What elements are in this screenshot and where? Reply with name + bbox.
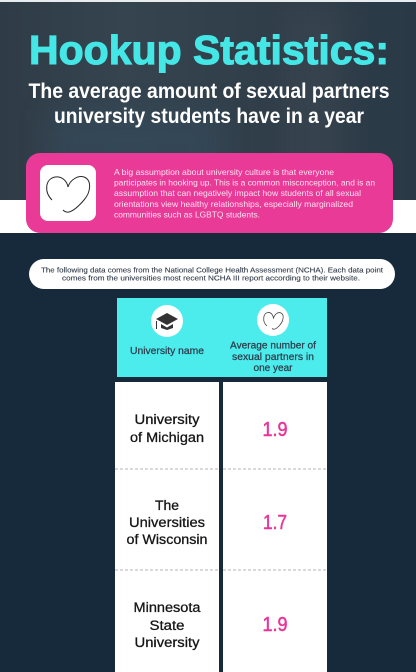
intro text: A big assumption about university culture is that everyone: [114, 168, 335, 177]
row 3 name: University: [134, 635, 200, 650]
source note: comes from the universities most recent NCHA III report according to their website.: [62, 274, 360, 282]
subtitle: university students have in a year: [54, 104, 365, 128]
column label: average: one year: [254, 363, 293, 374]
value row 1: 1.9: [262, 419, 288, 441]
row 3 name: Minnesota: [134, 600, 201, 615]
subtitle: [28, 79, 390, 128]
row 1 name: University: [134, 412, 200, 427]
title: Hookup Statistics:: [29, 27, 389, 73]
column: values: [223, 382, 327, 672]
value row 2: 1.7: [263, 512, 287, 534]
row 1 name: of Michigan: [130, 430, 204, 445]
column label: university: University name: [130, 346, 204, 357]
panel: intro callout: [26, 153, 393, 233]
icon: heart tile: [40, 165, 96, 221]
column label: average: Average number of: [230, 340, 316, 352]
column label: average: sexual partners in: [232, 352, 314, 363]
column label: average: [230, 340, 316, 374]
intro text: [114, 168, 375, 220]
intro text: communities such as LGBTQ students.: [114, 210, 260, 220]
row 3 name: [134, 600, 201, 650]
intro text: participates in hooking up. This is a common misconception, and is an: [114, 178, 375, 188]
icon: heart circle: [257, 304, 289, 336]
source note: The following data comes from the National College Health Assessment (NCHA). Each data point: [41, 266, 384, 274]
intro text: orientations view healthy relationships, especially marginalized: [114, 200, 353, 209]
row 2 name: Universities: [129, 515, 205, 530]
row 1 name: [130, 412, 204, 445]
value row 3: 1.9: [262, 614, 288, 636]
source note: [29, 259, 395, 289]
row 2 name: of Wisconsin: [126, 532, 208, 547]
row 2 name: [126, 498, 208, 547]
table header: [117, 298, 327, 377]
hero background: [0, 0, 416, 200]
row 2 name: The: [155, 498, 179, 513]
intro text: assumption that can negatively impact how students of all sexual: [114, 189, 361, 198]
row 3 name: State: [150, 618, 184, 633]
white band: [0, 200, 416, 233]
icon: graduation cap: [151, 305, 183, 337]
column: university names: [115, 382, 219, 672]
